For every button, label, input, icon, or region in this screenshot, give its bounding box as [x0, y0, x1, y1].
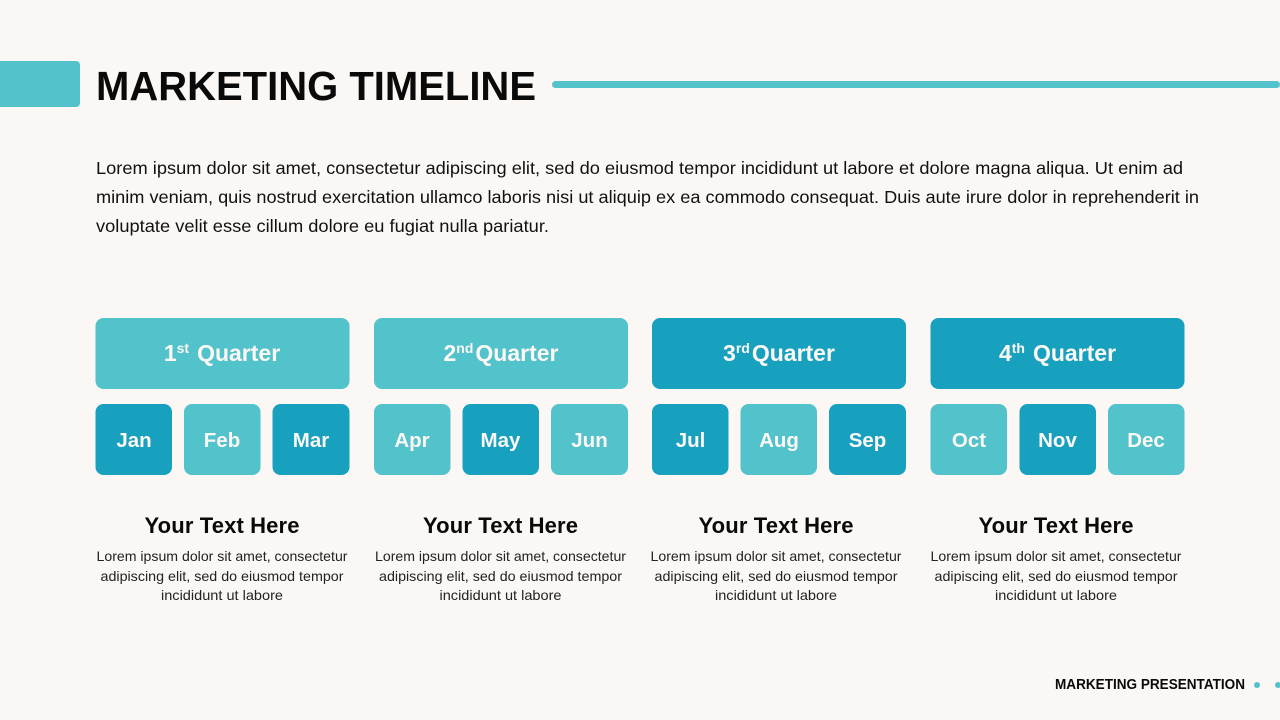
quarter header: 4th: th	[1012, 340, 1025, 356]
panel: second quarter	[374, 318, 628, 603]
quarter header: 4th	[930, 318, 1184, 389]
text block: third quarter	[650, 513, 902, 603]
text block: first quarter	[96, 513, 348, 603]
intro paragraph: minim veniam, quis nostrud exercitation ullamco laboris nisi ut aliquip ex ea commodo consequat. Duis aute irure dolor in reprehenderit in	[96, 187, 1199, 207]
text block: fourth quarter: Lorem ipsum dolor sit amet, consectetur	[930, 548, 1182, 564]
text block: third quarter: incididunt ut labore	[715, 587, 837, 603]
quarter header: 1st	[96, 318, 350, 389]
month: June	[551, 404, 628, 475]
text block: fourth quarter: adipiscing elit, sed do eiusmod tempor	[934, 568, 1178, 584]
month: March: Mar	[293, 429, 329, 452]
month: April: Apr	[394, 429, 430, 452]
month: October: Oct	[952, 429, 986, 452]
text block: first quarter: incididunt ut labore	[161, 587, 283, 603]
text block: third quarter: adipiscing elit, sed do eiusmod tempor	[654, 568, 898, 584]
intro paragraph: voluptate velit esse cillum dolore eu fugiat nulla pariatur.	[96, 216, 549, 236]
month: September: Sep	[849, 429, 886, 452]
panel: third quarter	[650, 318, 906, 603]
month: December: Dec	[1127, 429, 1165, 452]
text block: second quarter	[375, 513, 626, 603]
month: July	[652, 404, 728, 475]
month: June: Jun	[571, 429, 608, 452]
month: January	[96, 404, 172, 475]
panel: first quarter	[96, 318, 350, 603]
month: November: Nov	[1038, 429, 1077, 452]
text block: second quarter: incididunt ut labore	[440, 587, 562, 603]
text block: fourth quarter: Your Text Here	[978, 513, 1134, 538]
month: January: Jan	[116, 429, 152, 452]
quarter header: 2nd: 2	[444, 340, 456, 366]
quarter header: 4th: 4	[999, 340, 1012, 366]
text block: third quarter: Your Text Here	[698, 513, 854, 538]
footer label: MARKETING PRESENTATION	[1055, 677, 1245, 693]
text block: third quarter: Lorem ipsum dolor sit amet, consectetur	[650, 548, 902, 564]
month: March	[272, 404, 350, 475]
quarter header: 3rd: rd	[736, 340, 750, 356]
title: MARKETING TIMELINE	[96, 63, 536, 109]
text block: first quarter: adipiscing elit, sed do eiusmod tempor	[100, 568, 344, 584]
quarter header: 1st: 1	[164, 340, 177, 366]
quarter header: 3rd	[652, 318, 906, 389]
month: August	[740, 404, 817, 475]
text block: first quarter: Your Text Here	[144, 513, 300, 538]
quarter header: 1st: Quarter	[197, 340, 280, 366]
footer dots	[1254, 682, 1280, 688]
month: December	[1108, 404, 1184, 475]
intro paragraph	[96, 158, 1199, 236]
panel: fourth quarter	[930, 318, 1184, 603]
month: May: May	[481, 429, 521, 452]
month: October	[930, 404, 1007, 475]
text block: fourth quarter	[930, 513, 1182, 603]
quarter header: 2nd: nd	[456, 340, 473, 356]
header rule	[552, 81, 1280, 88]
header accent block	[0, 61, 80, 107]
month: July: Jul	[676, 429, 705, 452]
quarter header: 2nd	[374, 318, 628, 389]
text block: second quarter: adipiscing elit, sed do eiusmod tempor	[379, 568, 622, 584]
quarter header: 3rd: Quarter	[752, 340, 835, 366]
text block: first quarter: Lorem ipsum dolor sit amet, consectetur	[96, 548, 348, 564]
month: April	[374, 404, 450, 475]
intro paragraph: Lorem ipsum dolor sit amet, consectetur adipiscing elit, sed do eiusmod tempor incididunt ut labore et dolore magna aliqua. Ut enim ad	[96, 158, 1183, 178]
quarter header: 3rd: 3	[723, 340, 736, 366]
quarter header: 4th: Quarter	[1033, 340, 1116, 366]
quarter header: 1st: st	[177, 340, 189, 356]
text block: second quarter: Lorem ipsum dolor sit amet, consectetur	[375, 548, 626, 564]
quarter header: 2nd: Quarter	[475, 340, 559, 366]
month: February: Feb	[204, 429, 240, 452]
month: February	[184, 404, 260, 475]
month: August: Aug	[759, 429, 799, 452]
month: May	[462, 404, 539, 475]
text block: fourth quarter: incididunt ut labore	[995, 587, 1117, 603]
month: September	[829, 404, 906, 475]
text block: second quarter: Your Text Here	[423, 513, 578, 538]
month: November	[1020, 404, 1096, 475]
